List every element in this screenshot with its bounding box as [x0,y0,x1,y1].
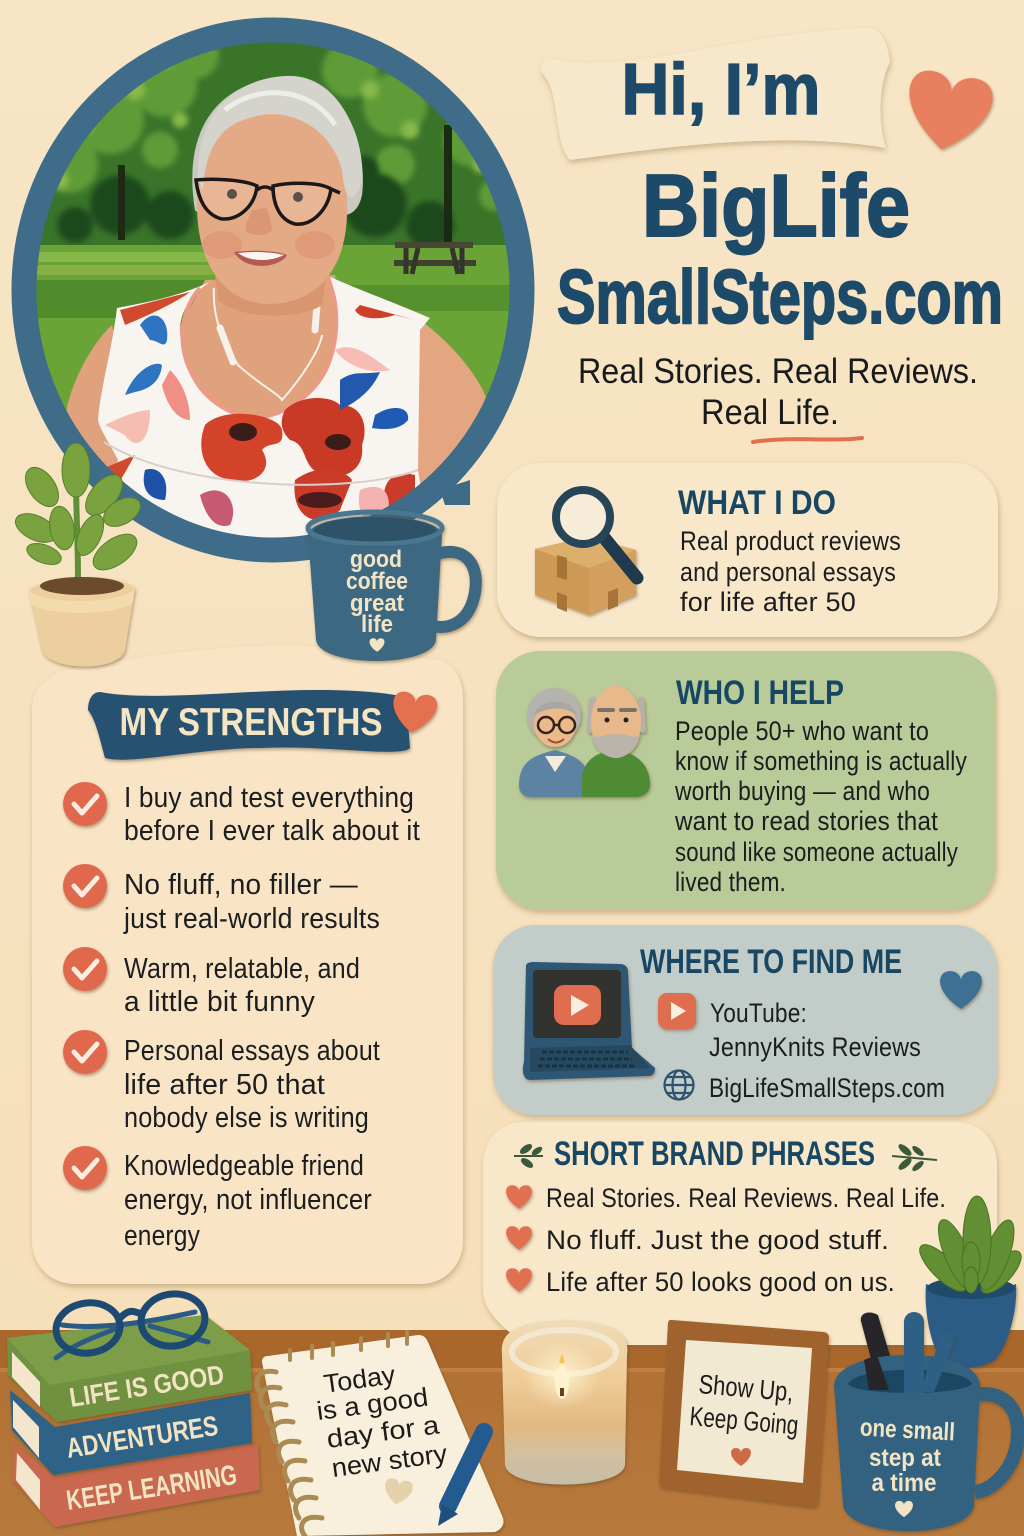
icon: YouTube [658,993,696,1029]
tagline [578,352,978,442]
title: BigLife: BigLife [642,156,910,255]
neck and chest [178,275,345,420]
strengths list: a little bit funny [124,986,315,1018]
picture frame: show up, keep going: Keep Going [688,1401,800,1440]
mug with pens [834,1310,1018,1531]
portrait photo in round frame [20,30,530,550]
check icons [63,782,107,1190]
icon: older couple [519,686,650,797]
icon: glasses [53,1290,208,1358]
strengths list: I buy and test everything [124,782,414,814]
book: life is good: LIFE IS GOOD [67,1359,226,1413]
earphones [214,288,322,400]
phrase 2: No fluff. Just the good stuff. [546,1225,889,1255]
spiral notebook [257,1332,503,1536]
strengths list: nobody else is writing [124,1102,369,1134]
nose and mouth [246,208,272,235]
phrase 3: Life after 50 looks good on us. [546,1267,895,1297]
icon: blue pen [448,1432,484,1506]
mug: good coffee great life: good [350,546,402,573]
panel: short brand phrases [483,1122,997,1345]
book: life is good [7,1315,252,1422]
panel: where to find me: JennyKnits Reviews [709,1032,921,1062]
book: adventures: ADVENTURES [64,1410,220,1464]
picture frame: show up, keep going [659,1320,829,1507]
title banner: Hi, I'm: Hi, I’m [622,50,820,130]
potted succulent [913,1196,1024,1368]
candle [502,1320,627,1485]
icon: laptop with play button [523,962,655,1080]
panel: my strengths [32,645,463,1284]
strengths list: life after 50 that [124,1069,325,1101]
picture frame: show up, keep going: Show Up, [697,1369,795,1407]
tagline: Real Life. [701,393,839,432]
strengths list [123,782,420,1252]
face [197,113,347,304]
panel: what I do: Real product reviews [680,526,901,556]
mug with pens: one small [859,1414,956,1446]
tagline: Real Stories. Real Reviews. [578,352,978,391]
icon: coral heart [900,68,996,156]
panel: who I help: lived them. [675,867,786,897]
book: keep learning: KEEP LEARNING [64,1459,239,1516]
wooden desk [0,1330,1024,1536]
panel: where to find me: BigLifeSmallSteps.com [709,1073,945,1103]
panel: who I help: sound like someone actually [675,837,958,867]
decorative sprig right [892,1142,937,1173]
mug: good coffee great life [308,512,476,661]
strengths banner [88,690,410,760]
decorative sprig left [514,1142,544,1170]
frame ring [440,480,470,505]
hair back [192,76,363,215]
arms [66,325,118,467]
panel: where to find me: WHERE TO FIND ME [640,943,902,981]
notebook text [315,1359,449,1483]
panel: who I help: People 50+ who want to [675,716,929,746]
panel: who I help: know if something is actually [675,746,967,776]
panel: what I do: for life after 50 [680,587,856,617]
mug: good coffee great life: great [350,590,404,617]
icon: globe [664,1070,694,1100]
notebook text: Today [322,1359,397,1399]
panel: what I do: WHAT I DO [678,484,836,522]
panel: who I help: WHO I HELP [676,674,844,712]
park background [36,42,510,410]
icon: box and magnifier [535,490,637,615]
strengths list: Warm, relatable, and [124,953,360,985]
strengths list: just real-world results [123,903,380,935]
notebook text: is a good [315,1382,430,1426]
mug: good coffee great life: coffee [346,568,408,595]
strengths list: energy [124,1220,200,1252]
panel: who I help: want to read stories that [674,806,938,836]
book: adventures [10,1390,252,1475]
panel: who I help: worth buying — and who [674,776,930,806]
panel: what I do [497,463,998,637]
icon: blue heart [940,971,982,1009]
neck [215,274,326,316]
book: keep learning [13,1443,260,1527]
strengths list: energy, not influencer [124,1184,372,1216]
glasses [196,179,340,224]
strengths list: Knowledgeable friend [124,1150,364,1182]
strengths list: Personal essays about [124,1035,380,1067]
icon: heart [390,690,438,736]
panel: who I help [496,651,996,910]
dress [98,277,430,545]
strengths list: No fluff, no filler — [124,869,358,901]
hair top [198,76,362,198]
title banner: Hi, I'm [541,28,890,160]
notebook text: day for a [325,1409,441,1454]
mug: good coffee great life: life [361,611,393,638]
phrase 1: Real Stories. Real Reviews. Real Life. [546,1183,946,1213]
notebook text: new story [330,1438,449,1483]
mug with pens: step at [869,1444,942,1472]
strengths banner: MY STRENGTHS [120,701,382,744]
panel: where to find me: YouTube: [710,998,807,1028]
mug with pens: a time [872,1469,937,1497]
panel: short brand phrases: SHORT BRAND PHRASES [554,1135,875,1173]
strengths list: before I ever talk about it [124,815,420,847]
panel: what I do: and personal essays [680,557,896,587]
dress neckline trim [183,280,336,417]
stack of books [7,1290,260,1527]
panel: where to find me [493,925,997,1115]
potted plant left [11,443,145,666]
dress flowers [100,292,418,526]
